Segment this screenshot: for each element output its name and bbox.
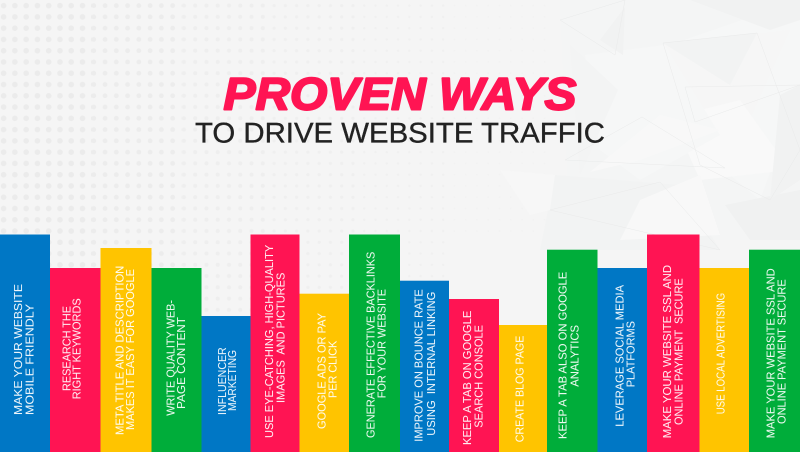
column: create blog page (499, 325, 547, 452)
column: leverage social media platforms: PLATFORMS (625, 321, 637, 387)
column: research the right keywords (50, 268, 100, 452)
column: use local advertising (700, 268, 749, 452)
column: make your website ssl secure: MAKE YOUR WEBSITE SSL AND (662, 265, 674, 438)
column: influencer marketing: INFLUENCER (217, 347, 229, 415)
column: meta title and description (100, 248, 152, 452)
column: make your website ssl secure (repeat): ONLINE PAYMENT SECURE (777, 279, 789, 424)
column: keep a tab on google search console (449, 299, 499, 452)
column: influencer marketing: MARKETING (227, 350, 239, 411)
column: generate effective backlinks (349, 234, 400, 452)
column: google ads or pay per click (300, 294, 349, 452)
column: make your website ssl secure (repeat) (749, 250, 800, 452)
column: leverage social media platforms (598, 268, 647, 452)
column: meta title and description: META TITLE AND DESCRIPTION (114, 266, 126, 435)
column: create blog page: CREATE BLOG PAGE (514, 335, 526, 442)
column: use eye-catching images (250, 234, 300, 452)
background low-poly shapes (500, 0, 800, 250)
column: write quality web-page content: WRITE QUALITY WEB- (165, 300, 177, 416)
column: google ads or pay per click: PER CLICK (328, 340, 340, 398)
column: keep a tab on google search console: KEEP A TAB ON GOOGLE (462, 310, 474, 445)
column: generate effective backlinks: GENERATE EFFECTIVE BACKLINKS (366, 251, 378, 438)
column: research the right keywords: RESEARCH THE (62, 306, 74, 391)
column: improve on bounce rate (400, 281, 449, 452)
column: use eye-catching images: IMAGES AND PICTURES (275, 272, 287, 403)
column: generate effective backlinks: FOR YOUR WEBSITE (377, 289, 389, 398)
column: keep a tab also on google analytics (547, 250, 598, 452)
column: use eye-catching images: USE EYE-CATCHING, HIGH-QUALITY (264, 244, 276, 438)
column: write quality web-page content (152, 268, 202, 452)
column: make your website ssl secure (647, 234, 700, 452)
column: leverage social media platforms: LEVERAGE SOCIAL MEDIA (614, 285, 626, 427)
column: google ads or pay per click: GOOGLE ADS OR PAY (317, 313, 329, 429)
column: keep a tab also on google analytics: KEEP A TAB ALSO ON GOOGLE (558, 271, 570, 439)
column: make your website mobile friendly: MAKE YOUR WEBSITE (13, 284, 25, 415)
column: keep a tab on google search console: SEARCH CONSOLE (473, 325, 485, 428)
column: research the right keywords: RIGHT KEYWORDS (72, 298, 84, 399)
column: keep a tab also on google analytics: ANALYTICS (569, 325, 581, 387)
column: improve on bounce rate: IMPROVE ON BOUNCE RATE (414, 289, 426, 442)
subtitle: to drive website traffic: TO DRIVE WEBSITE TRAFFIC (195, 118, 605, 150)
column: improve on bounce rate: USING INTERNAL LINKING (426, 292, 438, 436)
column: use local advertising: USE LOCAL ADVERTISING (716, 293, 728, 414)
column: make your website mobile friendly (0, 234, 50, 452)
column: write quality web-page content: PAGE CONTENT (176, 317, 188, 409)
column: make your website ssl secure (repeat): MAKE YOUR WEBSITE SSL AND (765, 268, 777, 438)
column: influencer marketing (202, 316, 250, 452)
background dot pattern (0, 0, 553, 320)
title: proven ways: PROVEN WAYS (224, 68, 576, 120)
column: meta title and description: MAKES IT EASY FOR GOOGLE (125, 269, 137, 430)
column: make your website ssl secure: ONLINE PAYMENT SECURE (673, 278, 685, 425)
column: make your website mobile friendly: MOBILE FRIENDLY (24, 304, 36, 415)
